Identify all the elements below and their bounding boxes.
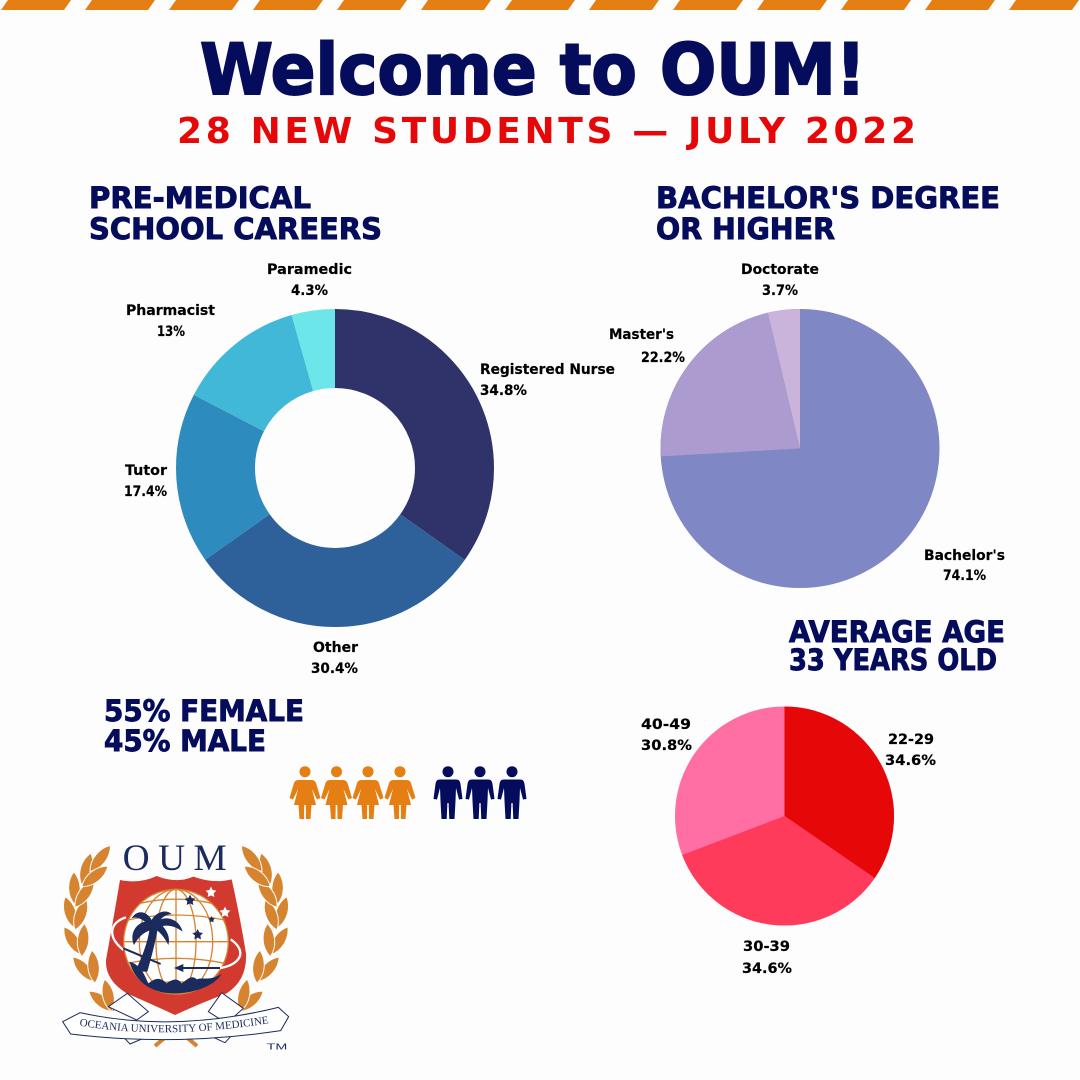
- heading: gender split: 45% MALE: [104, 724, 266, 758]
- donut chart: pre-medical school careers: [216, 348, 454, 588]
- heading: average age: AVERAGE AGE: [789, 615, 1005, 649]
- donut labels: Tutor: [125, 463, 167, 479]
- pie chart: age: [675, 706, 894, 926]
- pie labels: age: 22-29: [888, 732, 934, 748]
- heading: bachelor's degree or higher: [656, 181, 1000, 246]
- donut labels: 13%: [157, 324, 185, 340]
- donut labels: 4.3%: [291, 283, 328, 299]
- logo sea and waves: [129, 962, 222, 993]
- logo wordmark: OUM: [123, 838, 227, 879]
- logo shield: [106, 876, 246, 1015]
- heading: pre-medical school careers: SCHOOL CAREERS: [89, 212, 382, 246]
- donut labels: Other: [313, 640, 358, 656]
- pie labels: age: 34.6%: [885, 753, 936, 769]
- pie labels: degrees: Master's: [609, 327, 674, 343]
- donut labels: 30.4%: [311, 661, 358, 677]
- icons: female figures: [290, 766, 416, 819]
- pie labels: age: 34.6%: [742, 961, 792, 977]
- pie labels: degrees: Bachelor's: [924, 548, 1005, 564]
- pie labels: degrees: [609, 262, 1005, 584]
- heading: pre-medical school careers: [89, 181, 382, 246]
- logo palm tree: [132, 912, 183, 972]
- title: Welcome to OUM!: [200, 29, 866, 111]
- donut labels: Pharmacist: [126, 303, 215, 319]
- pie labels: degrees: 74.1%: [943, 568, 986, 584]
- logo globe: [124, 889, 228, 994]
- heading: bachelor's degree or higher: BACHELOR'S DEGREE: [656, 181, 1000, 215]
- logo stars: [185, 887, 230, 939]
- heading: pre-medical school careers: PRE-MEDICAL: [89, 181, 311, 215]
- donut labels: 17.4%: [124, 484, 167, 500]
- logo laurel wreath: [59, 842, 293, 1046]
- pie labels: degrees: Doctorate: [741, 262, 819, 278]
- donut labels: Paramedic: [267, 262, 352, 278]
- pie labels: age: 40-49: [641, 717, 691, 733]
- logo ribbon: [62, 992, 290, 1045]
- icons: male figures: [434, 766, 526, 819]
- heading: average age: [789, 615, 1005, 677]
- heading: gender split: [104, 694, 304, 758]
- pie chart: degrees: [660, 309, 940, 588]
- heading: average age: 33 YEARS OLD: [789, 643, 997, 677]
- logo orbit arrows: [112, 917, 240, 972]
- logo: Oceania University of Medicine crest: [62, 838, 290, 1052]
- subtitle: 28 NEW STUDENTS — JULY 2022: [177, 111, 916, 152]
- logo trademark: TM: [267, 1042, 287, 1052]
- heading: bachelor's degree or higher: OR HIGHER: [656, 212, 835, 246]
- logo ribbon text: OCEANIA UNIVERSITY OF MEDICINE: [80, 1016, 268, 1032]
- pie labels: degrees: 3.7%: [762, 283, 798, 299]
- top stripe band: [0, 0, 1080, 10]
- donut labels: 34.8%: [480, 383, 527, 399]
- donut labels: Registered Nurse: [480, 362, 615, 378]
- pie labels: age: 30.8%: [641, 738, 692, 754]
- pie labels: age: 30-39: [743, 939, 790, 955]
- pie labels: degrees: 22.2%: [641, 350, 685, 366]
- pie labels: age: [641, 717, 936, 977]
- donut labels: [124, 262, 615, 677]
- heading: gender split: 55% FEMALE: [104, 694, 304, 728]
